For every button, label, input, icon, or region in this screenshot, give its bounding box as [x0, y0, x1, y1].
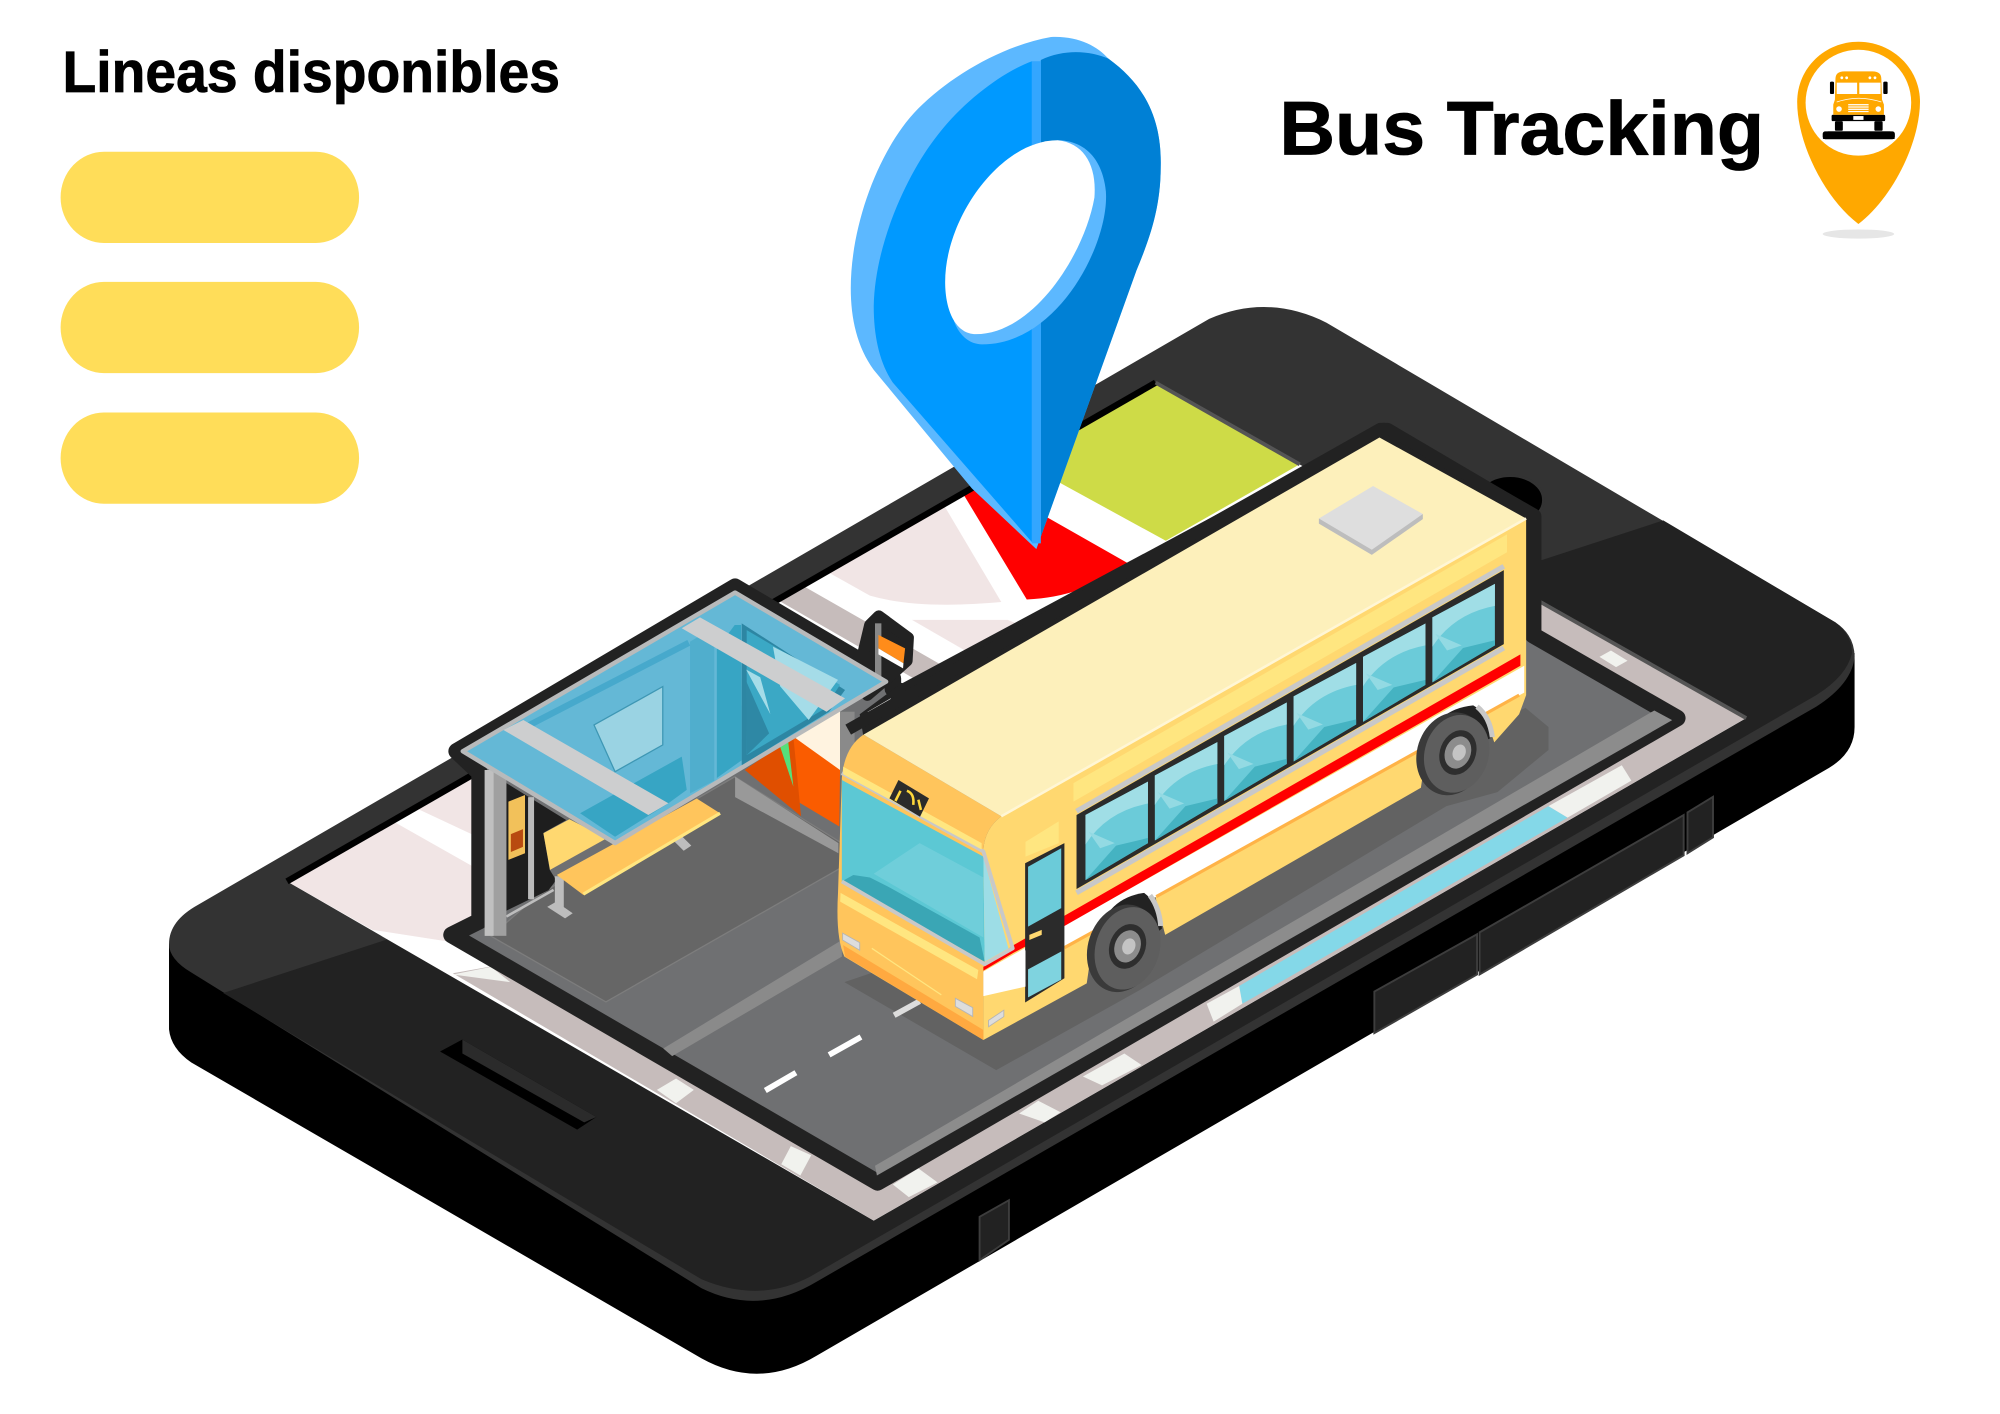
title: bus tracking: Bus Tracking — [1279, 86, 1764, 171]
left post — [485, 770, 506, 936]
phone — [169, 307, 1855, 1374]
bus shelter — [463, 593, 908, 936]
bench legs — [547, 837, 691, 918]
bench seat — [557, 798, 720, 895]
screen edges — [287, 383, 1156, 881]
bus roof — [864, 437, 1526, 816]
map base — [287, 383, 1746, 1221]
bus side windows — [1085, 584, 1495, 880]
map destination road — [963, 472, 1129, 599]
pin hole — [945, 140, 1095, 334]
pin left face — [874, 61, 1032, 542]
phone body extrusion — [169, 653, 1855, 1374]
destination sign — [889, 780, 929, 817]
line button 3 — [61, 412, 359, 504]
bus — [837, 425, 1533, 1040]
platform outline — [452, 431, 1677, 1182]
line button 2 — [61, 282, 359, 373]
bus window frame — [1077, 570, 1504, 889]
shelter glass roof — [463, 593, 886, 843]
map water strip — [1239, 806, 1568, 1004]
bus door — [1025, 821, 1064, 1003]
map curbs — [453, 586, 1746, 1221]
lane dashes — [765, 1001, 920, 1091]
icon: orange bus location pin — [1797, 42, 1920, 239]
pin hole rim — [954, 140, 1106, 344]
bus outline — [848, 429, 1533, 730]
rear wall base — [735, 777, 838, 853]
rear poster — [793, 704, 840, 772]
camera — [1477, 476, 1543, 524]
road platform — [452, 431, 1677, 1182]
sidewalk floor — [491, 777, 842, 1002]
front wheel — [1076, 893, 1171, 1001]
side buttons — [980, 797, 1713, 1260]
home button — [440, 1040, 596, 1130]
curb strip — [663, 940, 842, 1056]
location pin: big blue — [851, 37, 1161, 549]
pin centre strip — [1032, 61, 1041, 543]
roof air unit — [1319, 486, 1423, 555]
bus stripes — [983, 654, 1524, 996]
platform light edge — [875, 710, 1672, 1175]
dark panel and timetable — [506, 783, 566, 911]
pin outer rim — [851, 37, 1161, 549]
line buttons — [61, 152, 359, 504]
bus stop flag — [862, 616, 908, 695]
pin right face — [1036, 52, 1161, 549]
heading: lineas disponibles: Lineas disponibles — [63, 40, 560, 105]
shelter roof beams — [503, 617, 845, 815]
bus front — [837, 735, 1001, 1040]
road shadow — [844, 708, 1548, 1070]
bench back — [543, 819, 607, 870]
front trim — [840, 767, 1026, 1040]
phone screen map — [287, 383, 1746, 1221]
map curb stripes — [453, 650, 1631, 1197]
windshield — [842, 773, 1013, 964]
map park area — [1059, 383, 1300, 541]
black gap with lane dash — [860, 425, 1384, 737]
map pink blocks — [287, 505, 1020, 950]
headlights — [843, 933, 1004, 1027]
bus side upper band — [1073, 534, 1507, 802]
line button 1 — [61, 152, 359, 243]
rear wheel — [1406, 703, 1499, 804]
phone darker glare area — [223, 520, 1852, 1291]
phone top face — [169, 307, 1855, 1301]
bus side — [983, 518, 1526, 1040]
